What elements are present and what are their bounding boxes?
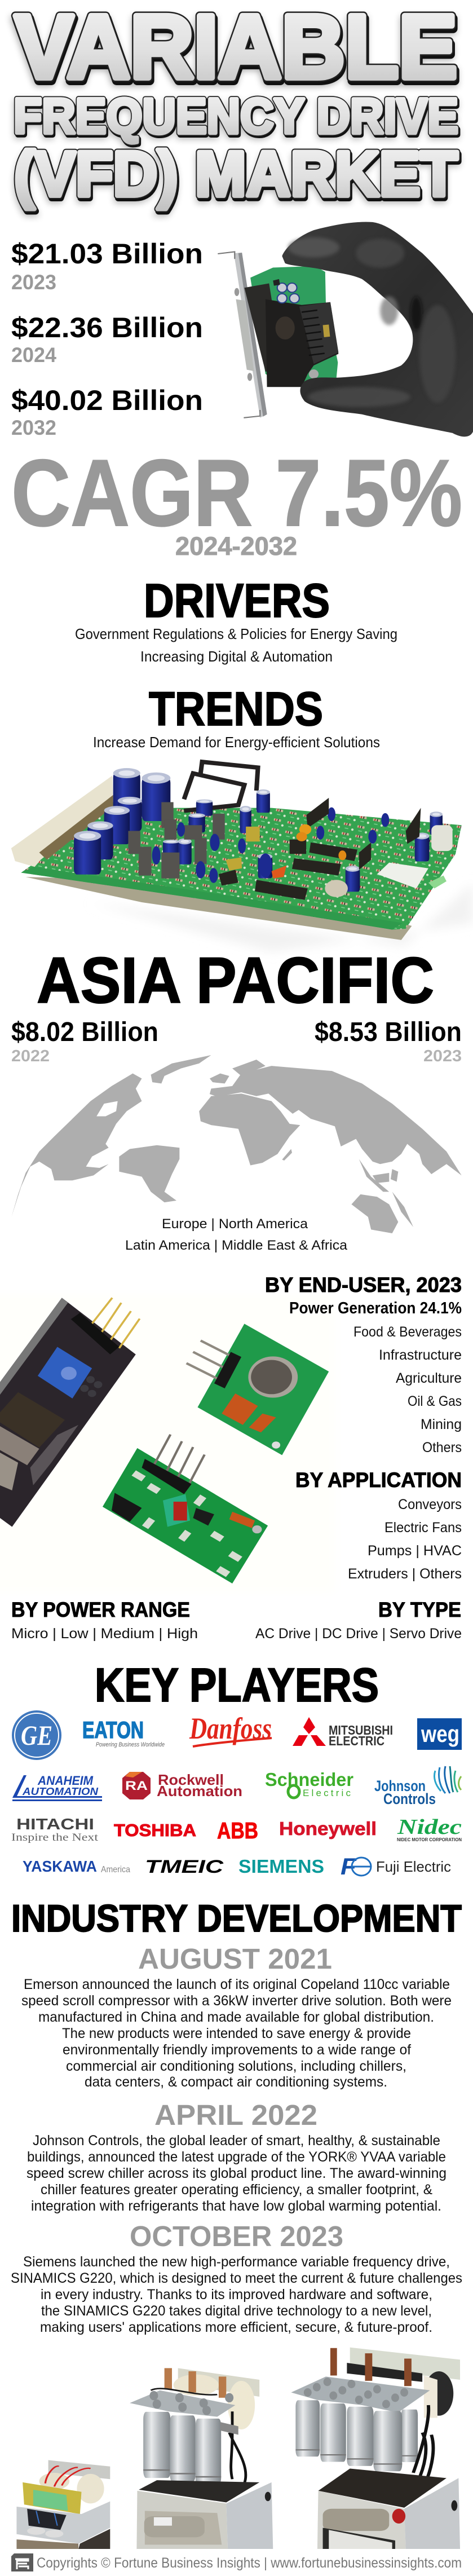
market size stats bbox=[11, 238, 203, 439]
small drive unit bbox=[16, 2460, 110, 2549]
drivers items: Increasing Digital & Automation bbox=[140, 648, 333, 665]
segment: by power range bbox=[11, 1598, 198, 1642]
description: Siemens launched the new high-performance variable frequency drive, bbox=[23, 2254, 450, 2270]
logo: Fuji Electric bbox=[341, 1853, 451, 1880]
description: speed scroll compressor with a 36kW inverter drive solution. Both were bbox=[21, 1993, 452, 2009]
eurasia bbox=[210, 1066, 462, 1175]
logo: Danfoss: Danfoss bbox=[189, 1712, 272, 1745]
title line: (VFD) MARKET: (VFD) MARKET bbox=[14, 139, 458, 209]
title line: VARIABLE: VARIABLE bbox=[15, 1, 457, 102]
description: The new products were intended to save energy & provide bbox=[62, 2026, 411, 2041]
segment: by type bbox=[255, 1598, 462, 1642]
hudson bay cutout bbox=[96, 1101, 118, 1116]
description: commercial air conditioning solutions, including chillers, bbox=[66, 2058, 406, 2074]
other regions list bbox=[125, 1216, 348, 1253]
key players logos bbox=[11, 1710, 462, 1880]
greenland bbox=[151, 1055, 211, 1083]
madagascar bbox=[282, 1149, 292, 1161]
south america bbox=[119, 1145, 179, 1202]
stat 2032: $40.02 Billion bbox=[11, 385, 203, 416]
footer bbox=[11, 2553, 462, 2571]
title bbox=[14, 0, 459, 214]
description bbox=[11, 2254, 462, 2335]
stat 2032: 2032 bbox=[11, 416, 56, 439]
title line: (VFD) MARKET: (VFD) MARKET bbox=[14, 143, 458, 214]
stat 2023: $21.03 Billion bbox=[11, 238, 203, 270]
stat 2024: $22.36 Billion bbox=[11, 312, 203, 343]
segment: by power range: Micro | Low | Medium | High bbox=[11, 1626, 198, 1642]
logo: Toshiba: TOSHIBA bbox=[114, 1820, 196, 1840]
pale photo background bbox=[0, 1294, 335, 1593]
date: OCTOBER 2023 bbox=[130, 2220, 343, 2252]
ic chips bbox=[219, 798, 421, 900]
green receiver module bbox=[103, 1435, 268, 1583]
logo: Fuji Electric: F bbox=[341, 1853, 357, 1880]
logo: Hitachi: HITACHI bbox=[16, 1815, 94, 1833]
logo: Nidec: Nidec bbox=[397, 1815, 462, 1839]
logo: Hitachi bbox=[11, 1815, 99, 1843]
trends item: Increase Demand for Energy-efficient Solutions bbox=[93, 734, 380, 751]
stat 2024 bbox=[11, 312, 203, 367]
drivers items bbox=[75, 625, 397, 665]
regional stat 2023: $8.53 Billion bbox=[315, 1017, 462, 1047]
logo: Anaheim Automation bbox=[12, 1774, 102, 1801]
stat 2023: 2023 bbox=[11, 271, 56, 294]
trends heading: TRENDS bbox=[149, 682, 323, 735]
end-user list: Mining bbox=[421, 1417, 462, 1432]
logo: Johnson Controls: Controls bbox=[383, 1790, 436, 1807]
logo: GE: GE bbox=[21, 1719, 52, 1751]
large blue capacitors bbox=[74, 768, 443, 892]
regional section heading: ASIA PACIFIC bbox=[37, 945, 434, 1017]
icon: Fortune Business Insights logo bbox=[11, 2553, 33, 2571]
logo: Schneider Electric: Schneider bbox=[265, 1769, 353, 1790]
logo: Anaheim Automation: ANAHEIM bbox=[37, 1774, 94, 1788]
application list: Electric Fans bbox=[384, 1520, 462, 1536]
segment: by application bbox=[295, 1468, 462, 1582]
green pcb bbox=[21, 802, 462, 929]
heading: BY END-USER, 2023 bbox=[265, 1273, 462, 1296]
drivers items: Government Regulations & Policies for Energy Saving bbox=[75, 625, 397, 642]
description: in every industry. Thanks to its improved hardware and software, bbox=[41, 2287, 432, 2302]
metal bracket bbox=[218, 252, 267, 418]
board cutout bbox=[377, 863, 428, 889]
image: drive units bbox=[16, 2348, 460, 2549]
regional stat 2022: $8.02 Billion bbox=[11, 1017, 158, 1047]
description: environmentally friendly improvements to a wide range of bbox=[63, 2042, 411, 2058]
gray transistors bbox=[128, 802, 225, 879]
base plate bbox=[25, 877, 412, 940]
logo: Hitachi: Inspire the Next bbox=[11, 1832, 99, 1843]
title line: VARIABLE: VARIABLE bbox=[16, 0, 458, 100]
stat 2024: 2024 bbox=[11, 343, 56, 367]
description: Johnson Controls, the global leader of smart, healthy, & sustainable bbox=[33, 2133, 440, 2149]
other regions list: Europe | North America bbox=[162, 1216, 308, 1232]
world map bbox=[11, 1055, 462, 1233]
british isles bbox=[210, 1074, 229, 1083]
logo: WEG bbox=[417, 1718, 462, 1750]
logo: Rockwell Automation: Rockwell bbox=[158, 1771, 224, 1788]
end-user list: Infrastructure bbox=[379, 1347, 462, 1363]
development: August 2021 bbox=[21, 1943, 452, 2090]
stat 2032 bbox=[11, 385, 203, 439]
logo: Rockwell Automation: RA bbox=[125, 1779, 148, 1793]
logo: Mitsubishi Electric: ELECTRIC bbox=[329, 1733, 384, 1748]
heatsink brackets bbox=[184, 762, 258, 811]
glove highlights bbox=[288, 237, 456, 407]
logo: Johnson Controls bbox=[374, 1766, 461, 1807]
development: October 2023 bbox=[11, 2220, 462, 2335]
logo: Fuji Electric: Fuji Electric bbox=[376, 1858, 451, 1875]
logo: Nidec bbox=[397, 1815, 462, 1842]
logo: Rockwell Automation bbox=[122, 1771, 242, 1799]
application list: Extruders | Others bbox=[348, 1566, 462, 1582]
description: data centers, & compact air conditioning systems. bbox=[85, 2074, 387, 2090]
development: April 2022 bbox=[26, 2099, 447, 2214]
logo: Honeywell: Honeywell bbox=[279, 1818, 377, 1839]
description: speed screw chiller across its global product line. The award-winning bbox=[26, 2165, 447, 2181]
regional stat 2023 bbox=[315, 1017, 462, 1065]
application list: Conveyors bbox=[398, 1497, 462, 1512]
africa bbox=[199, 1093, 300, 1165]
segment: by type: AC Drive | DC Drive | Servo Drive bbox=[255, 1626, 462, 1642]
logo: Nidec: NIDEC MOTOR CORPORATION bbox=[397, 1837, 462, 1842]
description bbox=[21, 1977, 452, 2090]
segment: by end-user bbox=[265, 1273, 462, 1455]
description: buildings, announced the latest upgrade of the YORK® YVAA variable bbox=[27, 2149, 446, 2165]
green transmitter module bbox=[187, 1324, 329, 1455]
logo: Yaskawa: YASKAWA bbox=[23, 1858, 97, 1875]
logo: GE bbox=[12, 1710, 61, 1760]
date: APRIL 2022 bbox=[154, 2099, 317, 2131]
logo: Yaskawa: America bbox=[101, 1865, 130, 1874]
description: integration with refrigerants that have low global warming potential. bbox=[31, 2198, 441, 2214]
description: manufactured in China and made available for global distribution. bbox=[38, 2009, 434, 2025]
regional stat 2022: 2022 bbox=[11, 1047, 50, 1065]
description: SINAMICS G220, which is designed to meet the current & future challenges bbox=[11, 2270, 462, 2286]
board shadow bbox=[91, 883, 473, 952]
heading: BY APPLICATION bbox=[295, 1468, 462, 1492]
southeast asia islands bbox=[359, 1159, 389, 1192]
image: gloved hand holding circuit board bbox=[218, 222, 473, 436]
description: making users' applications more efficient, secure, & future-proof. bbox=[40, 2319, 432, 2335]
application list bbox=[348, 1497, 462, 1582]
end-user list: Food & Beverages bbox=[353, 1324, 462, 1340]
key players heading: KEY PLAYERS bbox=[95, 1658, 379, 1712]
logo: Eaton: EATON bbox=[82, 1717, 144, 1743]
green circuit board bbox=[250, 266, 338, 386]
end-user list: Others bbox=[422, 1440, 462, 1455]
logo: TMEIC: TMEIC bbox=[145, 1856, 224, 1877]
large drive unit bbox=[291, 2348, 460, 2549]
end-user list bbox=[353, 1324, 462, 1455]
logo: Schneider Electric: Electric bbox=[303, 1788, 351, 1798]
segment: by power range: BY POWER RANGE bbox=[11, 1598, 190, 1621]
title line: (VFD) MARKET: (VFD) MARKET bbox=[15, 141, 459, 211]
logo: Siemens: SIEMENS bbox=[238, 1856, 324, 1877]
medium drive unit bbox=[130, 2368, 273, 2549]
description: Emerson announced the launch of its original Copeland 110cc variable bbox=[24, 1977, 450, 1992]
black connector and components bbox=[244, 279, 338, 387]
other regions list: Latin America | Middle East & Africa bbox=[125, 1238, 348, 1253]
logo: Mitsubishi Electric: MITSUBISHI bbox=[329, 1723, 393, 1737]
glove bbox=[282, 222, 473, 436]
trends section bbox=[93, 682, 380, 751]
edge connector bbox=[11, 776, 113, 867]
trim pot and clear connector bbox=[325, 825, 453, 897]
logo: Johnson Controls: Johnson bbox=[374, 1777, 426, 1794]
logo: Mitsubishi Electric bbox=[293, 1717, 393, 1748]
logo: Rockwell Automation: Automation bbox=[157, 1783, 242, 1799]
north america bbox=[11, 1074, 142, 1217]
logo: Eaton: Powering Business Worldwide bbox=[96, 1741, 165, 1748]
description: the SINAMICS G220 takes digital drive technology to a new level, bbox=[41, 2303, 432, 2319]
drivers section bbox=[75, 574, 397, 665]
regional stat 2022 bbox=[11, 1017, 158, 1065]
image: electronic modules bbox=[0, 1294, 335, 1593]
application list: Pumps | HVAC bbox=[368, 1543, 462, 1559]
small blue components bbox=[152, 808, 389, 883]
orange and yellow parts bbox=[226, 824, 346, 879]
end-user list: Oil & Gas bbox=[408, 1393, 462, 1409]
logo: ABB: ABB bbox=[217, 1818, 258, 1843]
logo: Anaheim Automation: AUTOMATION bbox=[22, 1786, 99, 1797]
CAGR period: 2024-2032 bbox=[175, 532, 297, 561]
description: chiller features greater operating efficiency, a smaller footprint, & bbox=[41, 2182, 432, 2198]
date: AUGUST 2021 bbox=[138, 1943, 332, 1975]
segment: by type: BY TYPE bbox=[378, 1598, 461, 1621]
scandinavia bbox=[232, 1060, 266, 1076]
title line: (VFD) MARKET: (VFD) MARKET bbox=[14, 139, 458, 209]
regional stat 2023: 2023 bbox=[423, 1047, 462, 1065]
stat 2023 bbox=[11, 238, 203, 294]
logo: WEG: weg bbox=[421, 1721, 459, 1747]
australia bbox=[351, 1194, 398, 1233]
image: populated circuit board bbox=[11, 762, 473, 952]
end-user list: Agriculture bbox=[396, 1370, 462, 1386]
description bbox=[26, 2133, 447, 2214]
drivers heading: DRIVERS bbox=[144, 574, 330, 627]
dark lcd adapter board bbox=[0, 1298, 140, 1527]
